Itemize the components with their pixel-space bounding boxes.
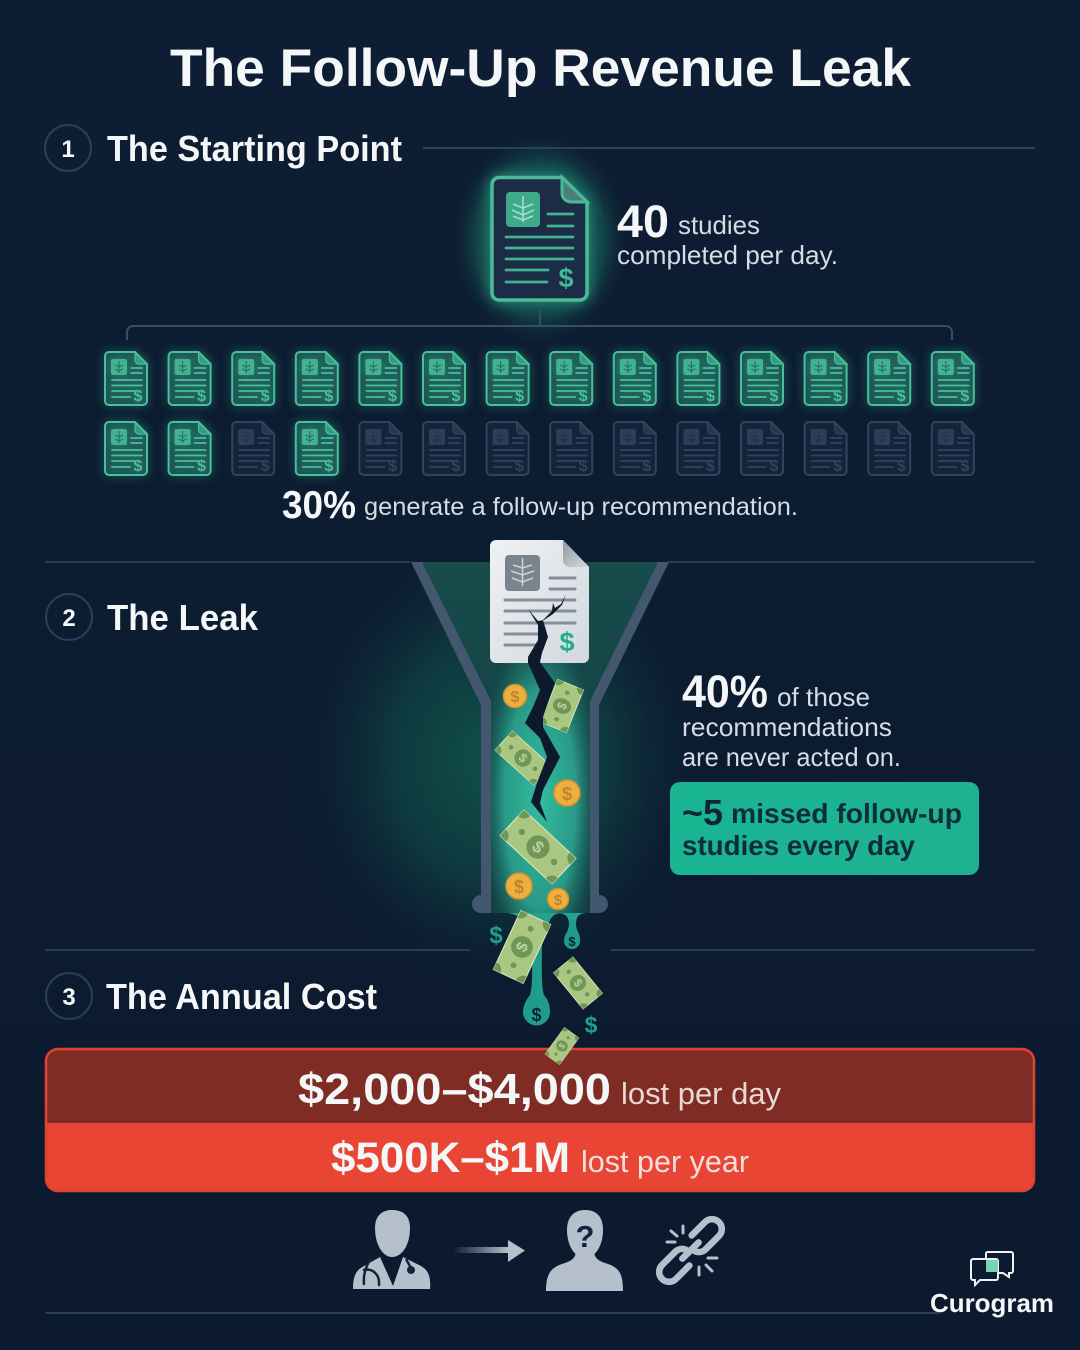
document grid: 40 studies: $: [770, 388, 779, 405]
bill: [540, 679, 584, 733]
leak drips: [523, 920, 580, 1026]
icon: main medical report document: [492, 178, 587, 300]
document grid: 40 studies: $: [642, 458, 651, 475]
falling dollar signs: $: [489, 922, 503, 949]
coin: $: [562, 784, 572, 804]
document grid: 40 studies: $: [197, 388, 206, 405]
document grid: 40 studies: $: [388, 388, 397, 405]
stat: 30%: generate a follow-up recommendation.: [364, 493, 798, 521]
stat: 40%: 40%: [682, 666, 768, 717]
panel: annual cost: [45, 1048, 1035, 1192]
falling dollar signs: [489, 922, 598, 1038]
bill: $: [513, 940, 532, 955]
document grid: 40 studies: $: [197, 458, 206, 475]
coin: $: [514, 877, 524, 897]
leak drips: $: [568, 934, 576, 949]
stat: 40%: are never acted on.: [682, 742, 901, 772]
document grid: 40 studies: $: [515, 388, 524, 405]
callout: ~5: [682, 792, 723, 833]
section 2 heading: [46, 594, 259, 640]
stat: 40 studies: 40: [617, 196, 669, 247]
title: The Follow-Up Revenue Leak: [170, 39, 912, 98]
bracket connector: [127, 310, 952, 340]
stat: 30%: [282, 484, 798, 527]
icon: main medical report document: $: [558, 263, 574, 293]
document grid: 40 studies: $: [579, 388, 588, 405]
section 1 heading: The Starting Point: [107, 128, 402, 169]
document grid: 40 studies: [105, 352, 974, 475]
bill: $: [571, 977, 585, 990]
document grid: 40 studies: $: [770, 458, 779, 475]
document grid: 40 studies: $: [960, 388, 969, 405]
crack through document: [525, 594, 566, 822]
document grid: 40 studies: $: [642, 388, 651, 405]
stat: 40%: [682, 666, 901, 772]
daily loss: $2,000–$4,000: [298, 1065, 611, 1114]
document grid: 40 studies: $: [134, 458, 143, 475]
section 2 heading: 2: [62, 605, 76, 632]
coin: [548, 888, 568, 910]
icon: unknown patient: ?: [576, 1219, 594, 1254]
bill: [553, 957, 603, 1009]
section 1 heading: 1: [61, 136, 75, 163]
coin: [506, 873, 532, 899]
bill: [495, 731, 551, 785]
stat: 40 studies: completed per day.: [617, 240, 838, 270]
falling dollar signs: $: [585, 1012, 598, 1038]
document grid: 40 studies: $: [261, 388, 270, 405]
coin: [554, 780, 580, 806]
icon: unknown patient: [546, 1210, 623, 1291]
arrow: [453, 1240, 525, 1262]
coin: $: [554, 892, 563, 909]
annual loss: lost per year: [581, 1144, 749, 1179]
annual loss: $500K–$1M: [331, 1134, 570, 1182]
document grid: 40 studies: $: [134, 388, 143, 405]
document grid: 40 studies: $: [833, 388, 842, 405]
icon: cracked report document: [490, 540, 589, 663]
callout: studies every day: [682, 830, 915, 861]
document grid: 40 studies: $: [897, 458, 906, 475]
daily loss: [298, 1065, 781, 1114]
document grid: 40 studies: $: [324, 458, 333, 475]
bill: $: [528, 837, 548, 858]
document grid: 40 studies: $: [324, 388, 333, 405]
section 1 heading: [45, 125, 1035, 171]
bill: $: [554, 700, 570, 712]
icon: broken link: [655, 1215, 726, 1286]
section 3 heading: The Annual Cost: [106, 976, 377, 1017]
annual loss: [331, 1134, 749, 1182]
stat: 40%: recommendations: [682, 712, 892, 742]
stat: 40 studies: [617, 196, 838, 270]
funnel walls: [411, 562, 669, 913]
dividers: [45, 562, 1035, 1313]
callout: [670, 782, 979, 875]
document grid: 40 studies: $: [706, 388, 715, 405]
document grid: 40 studies: $: [960, 458, 969, 475]
stat: 30%: 30%: [282, 484, 356, 527]
section 2 heading: The Leak: [107, 597, 259, 638]
daily loss: lost per day: [621, 1076, 781, 1111]
document grid: 40 studies: $: [452, 388, 461, 405]
icon: cracked report document: $: [559, 627, 575, 657]
bill: $: [557, 1041, 568, 1051]
document grid: 40 studies: $: [579, 458, 588, 475]
document grid: 40 studies: $: [897, 388, 906, 405]
teal leak glow: [240, 562, 800, 1042]
stat: 40 studies: studies: [678, 210, 760, 240]
logo: Curogram: Curogram: [930, 1288, 1054, 1318]
document grid: 40 studies: $: [706, 458, 715, 475]
document grid: 40 studies: $: [452, 458, 461, 475]
document grid: 40 studies: $: [388, 458, 397, 475]
document grid: 40 studies: $: [833, 458, 842, 475]
bill: $: [516, 751, 530, 766]
document grid: 40 studies: $: [261, 458, 270, 475]
icon: doctor: [353, 1210, 430, 1289]
coin: [504, 684, 526, 708]
stat: 40%: of those: [777, 682, 870, 712]
callout: missed follow-up: [731, 798, 962, 829]
bill: [500, 810, 576, 884]
bill: [493, 911, 551, 983]
leak drips: $: [531, 1005, 542, 1025]
document grid: 40 studies: $: [515, 458, 524, 475]
coin: $: [511, 689, 520, 706]
funnel interior: [422, 562, 658, 935]
bill: [545, 1027, 579, 1065]
section 3 heading: 3: [62, 984, 76, 1011]
icon glow behind main document: [448, 129, 632, 349]
logo: Curogram: [930, 1252, 1054, 1318]
